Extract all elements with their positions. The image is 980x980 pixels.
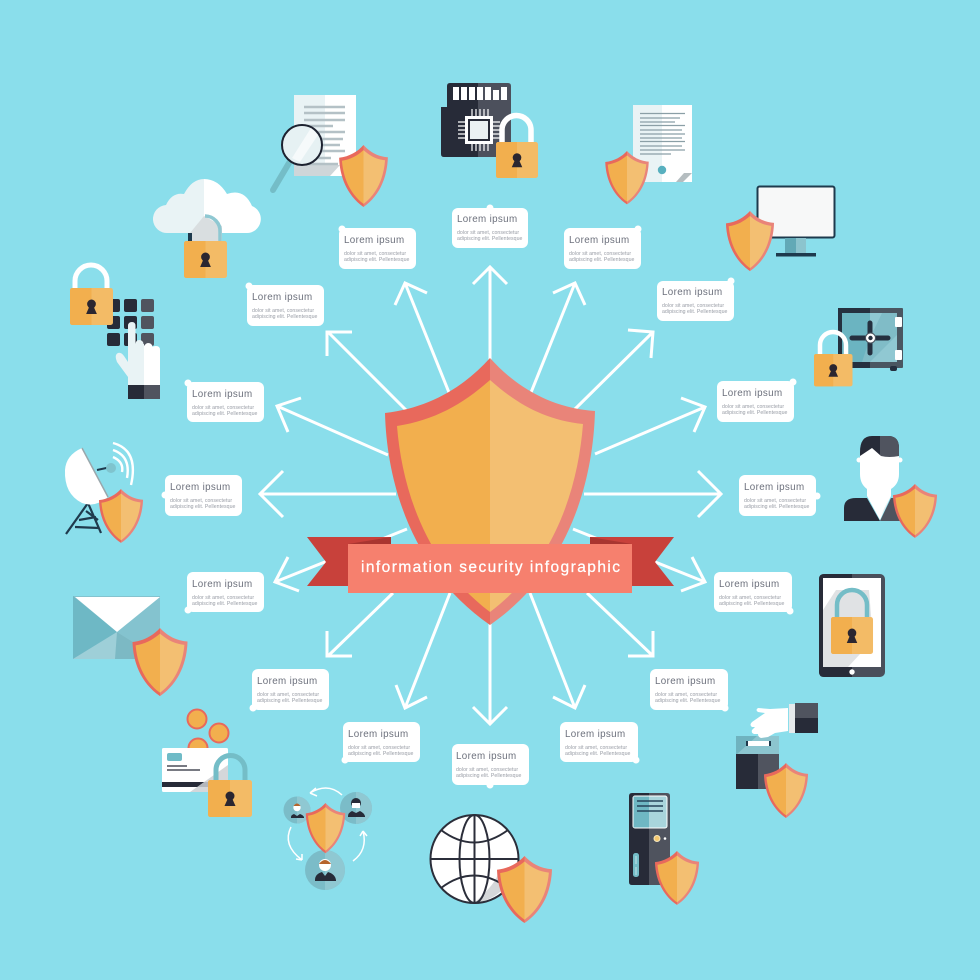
icon: business person with shield	[844, 436, 937, 538]
text box 8: adipiscing elit. Pellentesque	[170, 504, 236, 510]
icon: cloud with padlock	[153, 179, 261, 278]
text box bottom center: Lorem ipsum	[456, 751, 516, 762]
text box 15	[560, 722, 640, 764]
text box 13: dolor sit amet, consectetur	[655, 692, 717, 698]
text box 4: adipiscing elit. Pellentesque	[662, 309, 728, 315]
icon: satellite dish with shield	[65, 443, 143, 543]
text box 12: Lorem ipsum	[257, 676, 317, 687]
text box 10: adipiscing elit. Pellentesque	[192, 601, 258, 607]
icon: globe with shield	[430, 815, 552, 923]
text box 7: dolor sit amet, consectetur	[722, 404, 784, 410]
icon: document with magnifier and shield	[273, 95, 388, 207]
text box bottom center: dolor sit amet, consectetur	[456, 767, 518, 773]
icon: tablet with padlock	[819, 574, 885, 677]
text box 5: dolor sit amet, consectetur	[252, 308, 314, 314]
text box 6	[184, 380, 264, 422]
icon: computer tower with shield	[629, 793, 699, 905]
text box top center: adipiscing elit. Pellentesque	[457, 236, 523, 242]
text box 2: Lorem ipsum	[344, 235, 404, 246]
text box top center: Lorem ipsum	[457, 214, 517, 225]
text box bottom center: adipiscing elit. Pellentesque	[456, 773, 522, 779]
text box 10: Lorem ipsum	[192, 579, 252, 590]
text box 10	[184, 572, 264, 614]
text box 15: Lorem ipsum	[565, 729, 625, 740]
text box 8	[162, 475, 242, 516]
text box 10: dolor sit amet, consectetur	[192, 595, 254, 601]
text box 3: adipiscing elit. Pellentesque	[569, 257, 635, 263]
icon: monitor with shield	[726, 186, 834, 271]
text box 5: adipiscing elit. Pellentesque	[252, 314, 318, 320]
ribbon title banner	[307, 537, 674, 593]
text box 13: Lorem ipsum	[655, 676, 715, 687]
text box 6: dolor sit amet, consectetur	[192, 405, 254, 411]
icon: safe with padlock	[814, 308, 903, 386]
text box 5: Lorem ipsum	[252, 292, 312, 303]
text box 11: adipiscing elit. Pellentesque	[719, 601, 785, 607]
text box 3: dolor sit amet, consectetur	[569, 251, 631, 257]
text box bottom center	[452, 744, 529, 788]
icon: credit card with coins and padlock	[162, 710, 252, 817]
text box 12: adipiscing elit. Pellentesque	[257, 698, 323, 704]
text box 3: Lorem ipsum	[569, 235, 629, 246]
text box 12: dolor sit amet, consectetur	[257, 692, 319, 698]
text box 12	[250, 669, 329, 712]
text box 8: Lorem ipsum	[170, 482, 230, 493]
central shield	[385, 358, 595, 625]
text box 9: dolor sit amet, consectetur	[744, 498, 806, 504]
text box 11: Lorem ipsum	[719, 579, 779, 590]
text box 7	[717, 378, 796, 422]
text box 4	[657, 278, 734, 321]
text box 11	[714, 572, 794, 614]
icon: memory chip with padlock	[441, 83, 538, 178]
text box 4: Lorem ipsum	[662, 287, 722, 298]
text box 11: dolor sit amet, consectetur	[719, 595, 781, 601]
text box 13: adipiscing elit. Pellentesque	[655, 698, 721, 704]
icon: networked people with shield	[284, 788, 372, 890]
text box 15: adipiscing elit. Pellentesque	[565, 751, 631, 757]
text box 14	[342, 722, 420, 764]
text box 4: dolor sit amet, consectetur	[662, 303, 724, 309]
text box 7: Lorem ipsum	[722, 388, 782, 399]
text box 2: dolor sit amet, consectetur	[344, 251, 406, 257]
text box 13	[650, 669, 728, 712]
text box 8: dolor sit amet, consectetur	[170, 498, 232, 504]
text box 9	[739, 475, 820, 516]
text box top center	[452, 204, 528, 248]
icon: envelope with shield	[73, 596, 188, 696]
text box 6: adipiscing elit. Pellentesque	[192, 411, 258, 417]
text box 2: adipiscing elit. Pellentesque	[344, 257, 410, 263]
icon: hand over ballot box with shield	[736, 703, 818, 818]
text box 14: adipiscing elit. Pellentesque	[348, 751, 414, 757]
text box 15: dolor sit amet, consectetur	[565, 745, 627, 751]
text box top center: dolor sit amet, consectetur	[457, 230, 519, 236]
icon: certificate document with shield	[605, 105, 692, 204]
text box 14: Lorem ipsum	[348, 729, 408, 740]
text box 2	[338, 226, 416, 269]
text box 7: adipiscing elit. Pellentesque	[722, 410, 788, 416]
text box 3	[564, 226, 642, 269]
icon: keypad with hand and padlock	[70, 265, 160, 399]
text box 9: adipiscing elit. Pellentesque	[744, 504, 810, 510]
text box 5	[246, 282, 324, 326]
text box 9: Lorem ipsum	[744, 482, 804, 493]
text box 6: Lorem ipsum	[192, 389, 252, 400]
text box 14: dolor sit amet, consectetur	[348, 745, 410, 751]
ribbon title banner: information security infographic	[361, 559, 620, 576]
arrows radiating from the central shield	[260, 267, 721, 724]
